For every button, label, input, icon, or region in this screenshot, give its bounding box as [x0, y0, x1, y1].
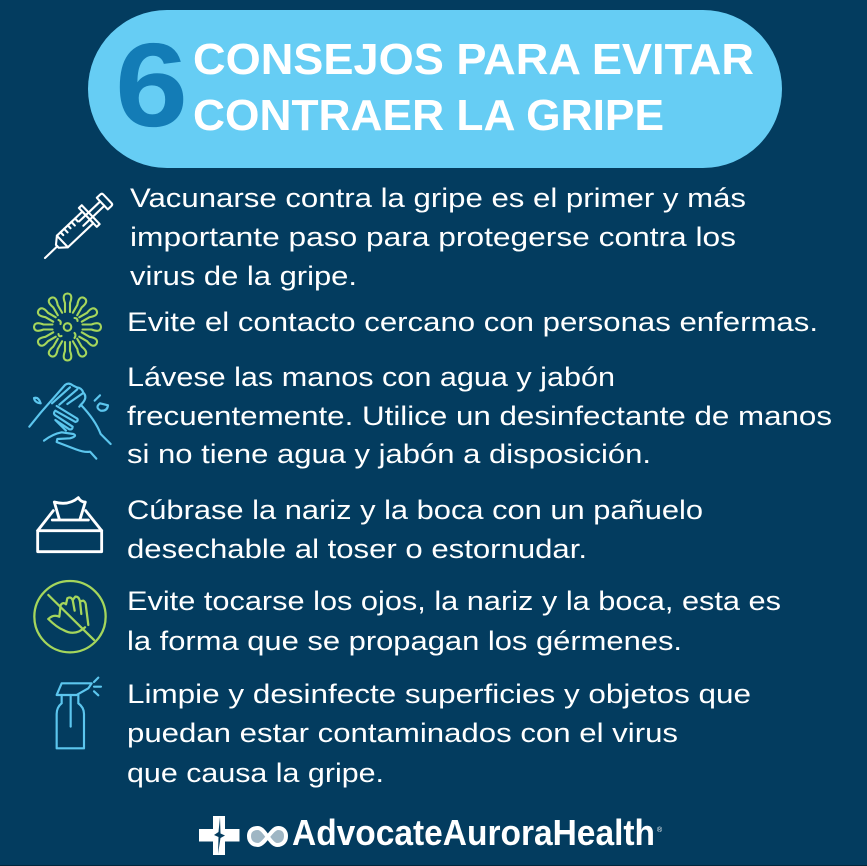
tip 6 text: Limpie y desinfecte superficies y objetos que — [127, 679, 751, 709]
tip 4: cover nose and mouth — [38, 495, 703, 564]
title text — [193, 35, 754, 140]
tip 5 text: la forma que se propagan los gérmenes. — [127, 626, 682, 656]
icon: spray bottle — [57, 678, 101, 748]
tip 1 text: Vacunarse contra la gripe es el primer y más — [130, 183, 746, 213]
tip 1 text: virus de la gripe. — [130, 261, 357, 291]
tip 3 text: si no tiene agua y jabón a disposición. — [127, 439, 651, 469]
tip 3 text — [127, 362, 832, 469]
tip 5: do not touch face — [34, 581, 781, 656]
registered mark: ® — [657, 826, 663, 834]
tip 3: wash hands — [29, 362, 832, 469]
tip 1 text: importante paso para protegerse contra los — [130, 222, 736, 252]
tip 6 text — [127, 679, 751, 788]
tip 4 text: Cúbrase la nariz y la boca con un pañuelo — [127, 495, 703, 525]
title text: CONTRAER LA GRIPE — [193, 91, 664, 140]
tip 1: vaccine — [36, 183, 746, 291]
tip 2: avoid contact — [34, 294, 818, 360]
tip 3 text: Lávese las manos con agua y jabón — [127, 362, 615, 392]
logo: Advocate Aurora Health — [199, 812, 663, 855]
title banner — [88, 10, 782, 168]
tip 2 text: Evite el contacto cercano con personas enfermas. — [127, 307, 818, 337]
tip 6 text: que causa la gripe. — [127, 758, 384, 788]
tip 4 text: desechable al toser o estornudar. — [127, 534, 587, 564]
big number 6: 6 — [115, 19, 188, 152]
icon: washing hands — [29, 384, 111, 459]
wordmark: AdvocateAuroraHealth — [292, 812, 655, 853]
tip 5 text: Evite tocarse los ojos, la nariz y la boca, esta es — [127, 586, 781, 616]
tip 5 text — [127, 586, 781, 656]
icon: crossed-out hand — [34, 581, 106, 652]
icon: virus — [34, 294, 101, 360]
tip 6: disinfect surfaces — [57, 678, 751, 788]
tip 3 text: frecuentemente. Utilice un desinfectante de manos — [127, 401, 832, 431]
tip 6 text: puedan estar contaminados con el virus — [127, 718, 678, 748]
icon: cross — [199, 816, 240, 855]
icon: syringe — [36, 189, 116, 267]
tip 4 text — [127, 495, 703, 564]
banner pill — [88, 10, 782, 168]
icon: tissue box — [38, 498, 102, 552]
title text: CONSEJOS PARA EVITAR — [193, 35, 754, 84]
tip 1 text — [130, 183, 746, 291]
icon: infinity symbol — [249, 828, 286, 845]
